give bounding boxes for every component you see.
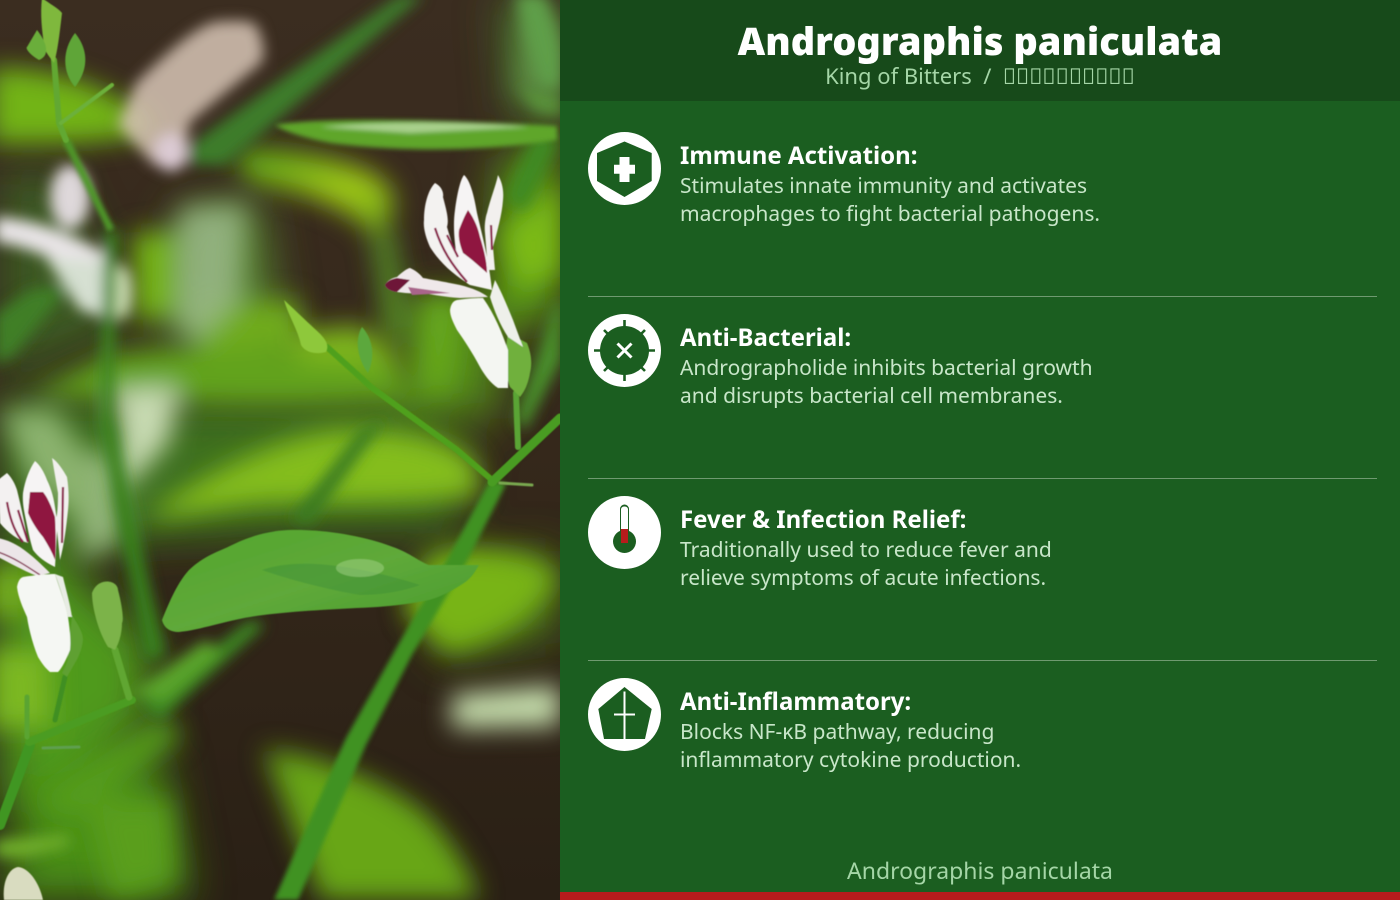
text: immune activation: [680, 139, 1100, 228]
text: fever and infection relief: Fever & Infection Relief:: [680, 503, 966, 536]
text: anti-inflammatory: [680, 685, 1021, 774]
text: fever and infection relief: [680, 503, 1052, 592]
icon: bacteria target: [588, 314, 661, 387]
title: Andrographis paniculata: [738, 15, 1222, 67]
benefit: immune activation: [588, 132, 1100, 228]
text: anti-bacterial: [680, 321, 1093, 410]
text: anti-bacterial: Andrographolide inhibits bacterial growth: [680, 354, 1093, 382]
text: immune activation: macrophages to fight bacterial pathogens.: [680, 200, 1100, 228]
text: fever and infection relief: Traditionally used to reduce fever and: [680, 536, 1052, 564]
benefit: fever and infection relief: [588, 496, 1052, 592]
subtitle: King of Bitters / : [825, 61, 1135, 91]
text: immune activation: Stimulates innate immunity and activates: [680, 172, 1087, 200]
text: anti-inflammatory: Anti-Inflammatory:: [680, 685, 911, 718]
flower left: [62, 615, 83, 677]
icon: pentagon cross: [588, 678, 661, 751]
icon: shield with cross: [588, 132, 661, 205]
benefit: anti-bacterial: [588, 314, 1093, 410]
right panel background: [560, 0, 1400, 900]
text: anti-inflammatory: inflammatory cytokine production.: [680, 746, 1021, 774]
photo: Andrographis plant: [0, 0, 560, 900]
text: immune activation: Immune Activation:: [680, 139, 918, 172]
text: anti-bacterial: Anti-Bacterial:: [680, 321, 851, 354]
footer caption: Andrographis paniculata: [847, 854, 1113, 886]
flower right: [506, 333, 531, 397]
header band: [560, 0, 1400, 101]
text: fever and infection relief: relieve symptoms of acute infections.: [680, 564, 1046, 592]
text: anti-bacterial: and disrupts bacterial cell membranes.: [680, 382, 1063, 410]
sharp stems: [0, 60, 560, 825]
buds: [284, 300, 327, 353]
icon: thermometer: [588, 496, 661, 569]
focused leaf: [162, 530, 479, 632]
text: anti-inflammatory: Blocks NF-κB pathway, reducing: [680, 718, 994, 746]
footer red bar: [560, 892, 1400, 900]
benefit: anti-inflammatory: [588, 678, 1021, 774]
